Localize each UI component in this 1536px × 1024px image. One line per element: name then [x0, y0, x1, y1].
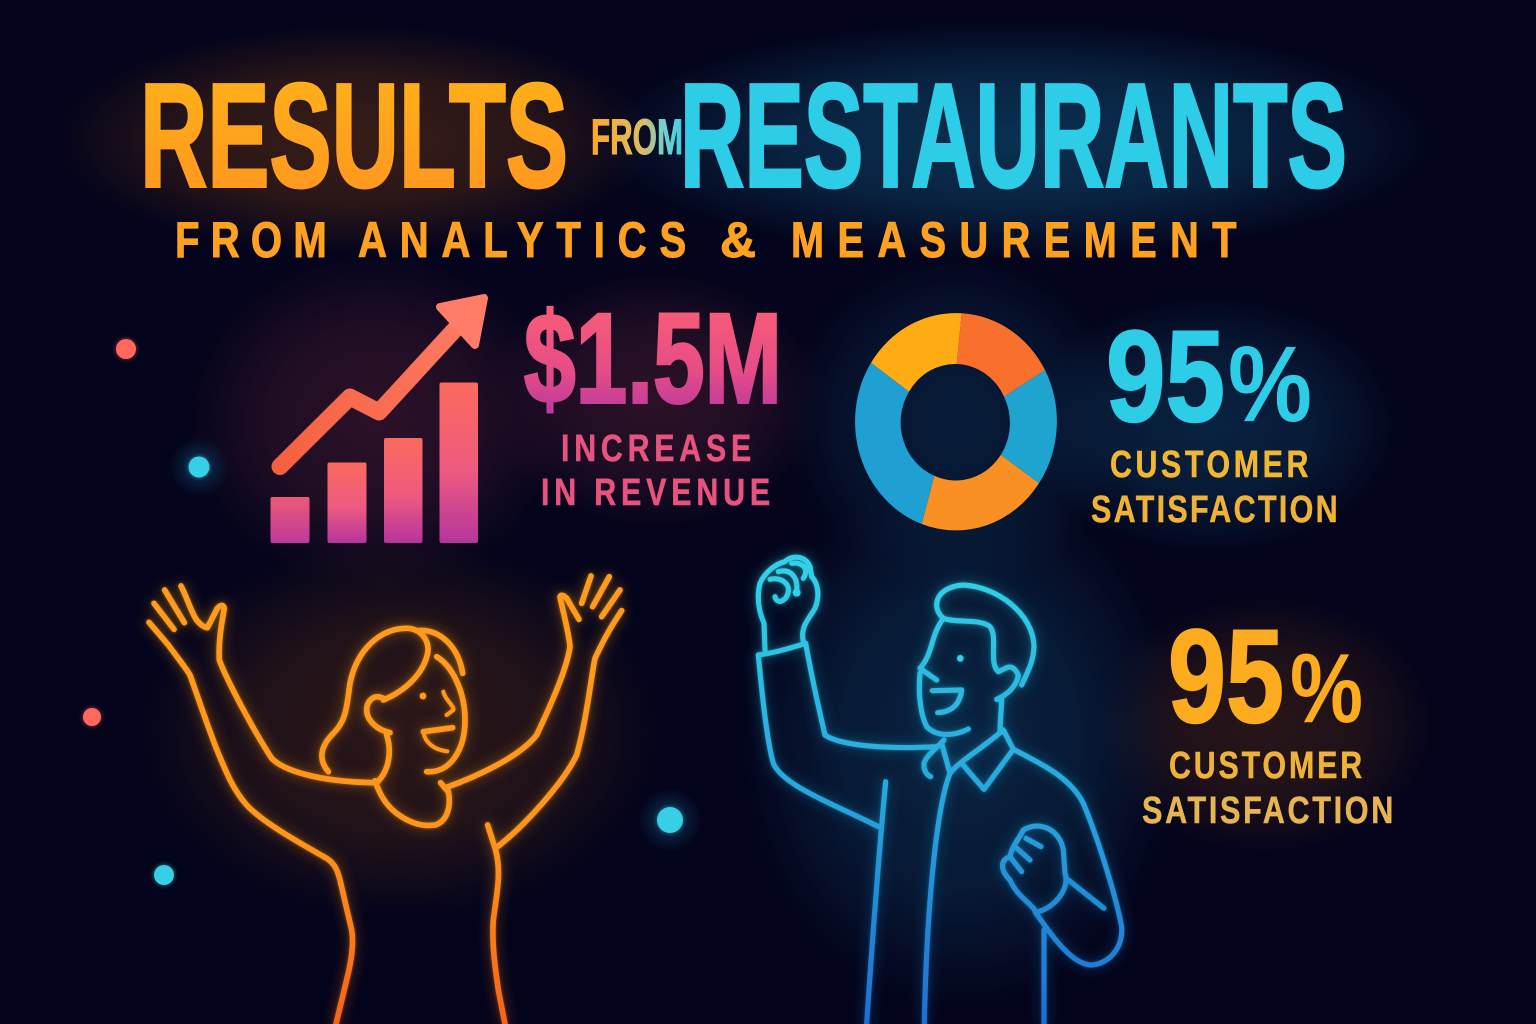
title word: FROM: FROM: [591, 109, 683, 165]
percentage digits: 95: [1168, 603, 1284, 751]
stat: customer satisfaction (blue): [1091, 303, 1340, 531]
title: [140, 54, 1347, 218]
label line 1: CUSTOMER: [1110, 444, 1312, 486]
illustration: celebrating man outline: [758, 557, 1122, 1024]
stat: customer satisfaction (orange): [1142, 603, 1396, 832]
label line 2: SATISFACTION: [1091, 489, 1340, 531]
title word: RESULTS: RESULTS: [140, 54, 568, 218]
percentage digits: 95: [1106, 303, 1225, 449]
percent sign: %: [1290, 633, 1363, 743]
revenue label line 1: INCREASE: [561, 428, 756, 470]
subtitle: FROM: [175, 212, 338, 268]
growth arrow: [280, 298, 484, 466]
subtitle: MEASUREMENT: [791, 212, 1250, 268]
revenue figure: $1.5M: [524, 288, 782, 430]
subtitle: [175, 212, 1250, 268]
bars: [270, 382, 478, 543]
subtitle: &: [720, 212, 756, 268]
stat: revenue: [524, 288, 782, 514]
label line 1: CUSTOMER: [1169, 745, 1365, 787]
donut chart: [855, 313, 1057, 530]
decorative glowing dots: [83, 339, 683, 885]
revenue label line 2: IN REVENUE: [541, 472, 775, 514]
percent sign: %: [1228, 323, 1312, 444]
label line 2: SATISFACTION: [1142, 790, 1396, 832]
illustration: celebrating woman outline: [149, 576, 622, 1024]
subtitle: ANALYTICS: [358, 212, 699, 268]
icon: rising bar chart with arrow: [270, 298, 484, 543]
